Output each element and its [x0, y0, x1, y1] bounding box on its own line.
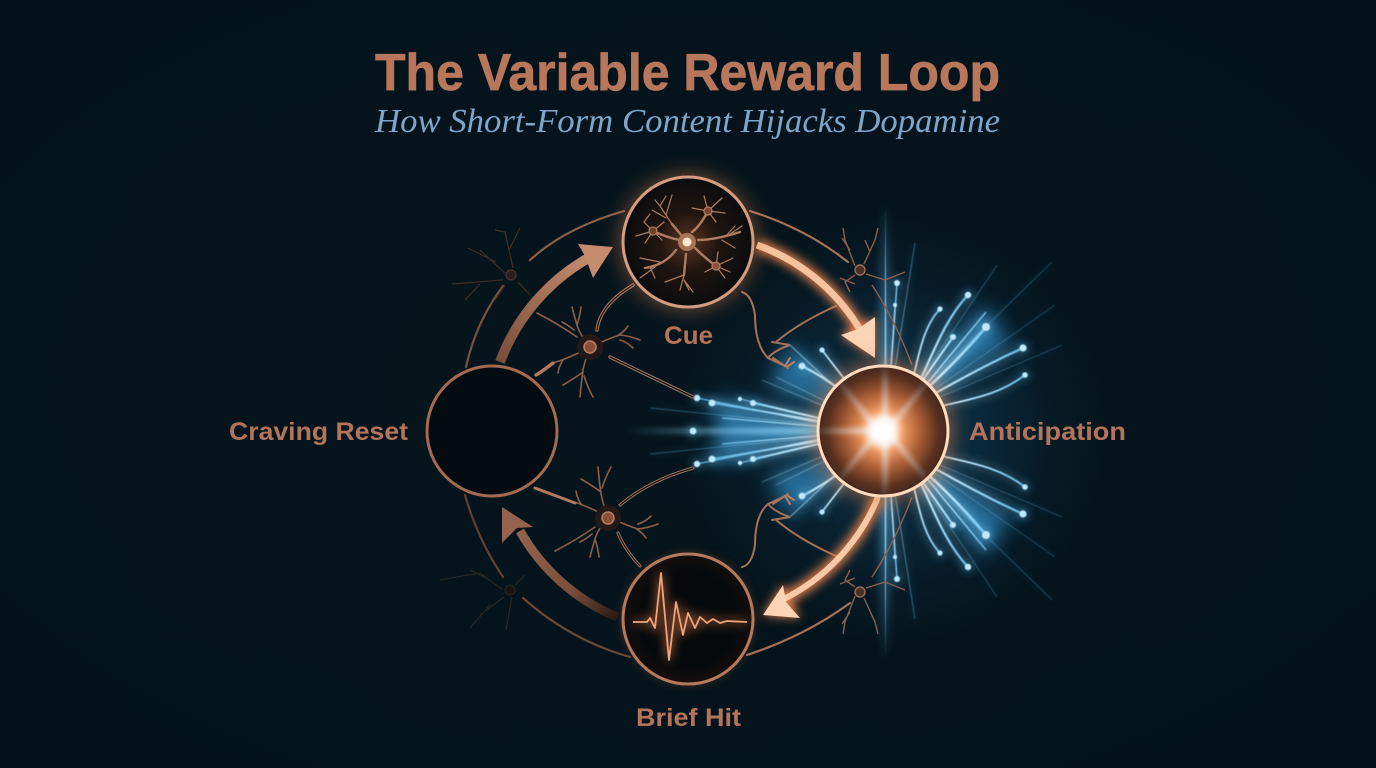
burst dots glow: [689, 280, 1028, 582]
brief hit disc: [623, 554, 753, 684]
arrow: brief hit to craving reset: [502, 507, 617, 617]
outer ring segments: [465, 211, 850, 657]
central horizontal ray: [625, 427, 850, 435]
cue glow: [620, 174, 756, 310]
node: brief hit: [622, 553, 754, 685]
arrow: craving reset to cue: [500, 244, 613, 362]
burst fine rays: [650, 243, 1062, 619]
soma lower: [595, 505, 621, 531]
dendrites upper: [537, 307, 640, 397]
icon: decaying waveform glow: [633, 573, 747, 660]
label: anticipation: Anticipation: [969, 418, 1126, 446]
label: cue: Cue: [664, 322, 713, 350]
node: anticipation: [813, 361, 953, 501]
blue energy glow: [680, 216, 1110, 646]
label: brief hit: Brief Hit: [636, 704, 742, 732]
icon: neuron cluster: [636, 195, 742, 292]
arrow: cue to anticipation: [757, 245, 875, 358]
burst glow layer: [650, 243, 1062, 619]
blue dopamine burst: [625, 200, 1062, 662]
faint neuron: upper left: [452, 228, 530, 300]
faint neuron: lower left: [440, 570, 525, 630]
dendrites lower: [555, 467, 658, 557]
soma upper: [577, 334, 603, 360]
burst bright wedges: [715, 305, 1010, 557]
icon: decaying waveform: [633, 573, 747, 660]
anticipation orb: [818, 366, 948, 496]
anticipation ring: [818, 366, 948, 496]
neuron: upper: [536, 285, 693, 397]
axons lower: [535, 468, 693, 566]
neuron: lower: [535, 467, 693, 566]
synapse connectors: upper right: [742, 292, 836, 368]
anticipation glow: [813, 361, 953, 501]
axons upper: [536, 285, 693, 397]
cue disc: [623, 177, 753, 307]
arrow: anticipation to brief hit: [763, 497, 878, 618]
neuron: lower right: [840, 497, 912, 634]
core flare: [868, 416, 898, 446]
brief hit glow: [622, 553, 754, 685]
node: cue: [620, 174, 756, 310]
star rays: [815, 362, 932, 500]
title: The Variable Reward Loop: [375, 44, 1000, 102]
subtitle: How Short-Form Content Hijacks Dopamine: [374, 103, 1000, 140]
synapse connectors: lower right: [742, 494, 836, 567]
label: craving reset: Craving Reset: [229, 418, 409, 446]
neuron: upper right: [840, 228, 912, 365]
burst dots: [690, 280, 1028, 582]
vertical beam: [880, 200, 890, 662]
node: craving reset: [427, 366, 557, 496]
cue central soma: [678, 233, 696, 251]
